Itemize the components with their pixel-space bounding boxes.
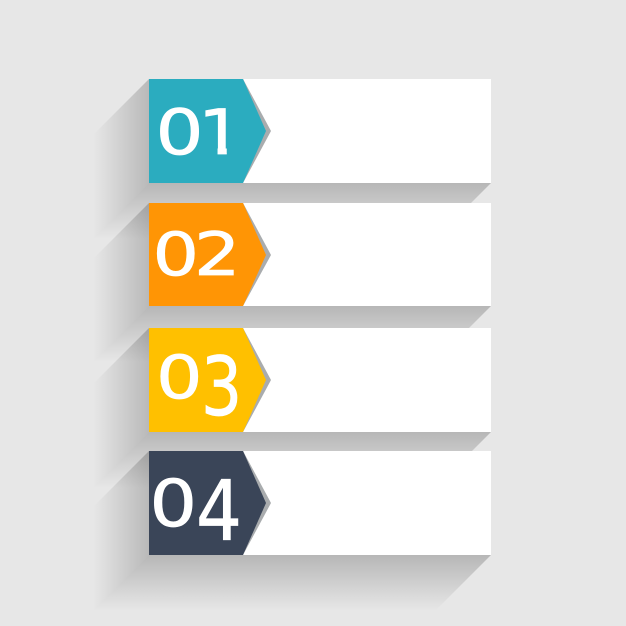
number 04 — [150, 464, 242, 560]
number 04: 0 — [149, 466, 197, 542]
panel: row 01 — [149, 79, 491, 183]
number 04: 4 — [196, 464, 242, 560]
number 03: 0 — [156, 342, 203, 412]
panel: row 04 — [149, 451, 491, 560]
panel: row 03 — [149, 328, 491, 435]
badge 03 — [149, 328, 266, 432]
number 02 — [153, 219, 241, 289]
arrow shadow 01 — [243, 79, 271, 183]
number 01 — [160, 107, 227, 156]
number 03 — [156, 341, 242, 435]
arrow shadow 03 — [243, 328, 271, 432]
arrow shadow 02 — [243, 203, 271, 306]
number 02: 0 — [153, 219, 199, 289]
badge 04 — [149, 451, 266, 555]
long shadows — [93, 79, 491, 611]
panel: row 02 — [149, 203, 491, 306]
arrow shadow 04 — [243, 451, 271, 555]
number 02: 2 — [194, 219, 241, 289]
number 03: 3 — [201, 341, 242, 435]
white card 04 — [149, 451, 491, 555]
badge 01 — [149, 79, 266, 183]
badge 02 — [149, 203, 266, 306]
number 01: 1 — [198, 96, 243, 169]
white card 03 — [149, 328, 491, 432]
number 01: 0 — [155, 98, 204, 169]
white card 01 — [149, 79, 491, 183]
white card 02 — [149, 203, 491, 306]
